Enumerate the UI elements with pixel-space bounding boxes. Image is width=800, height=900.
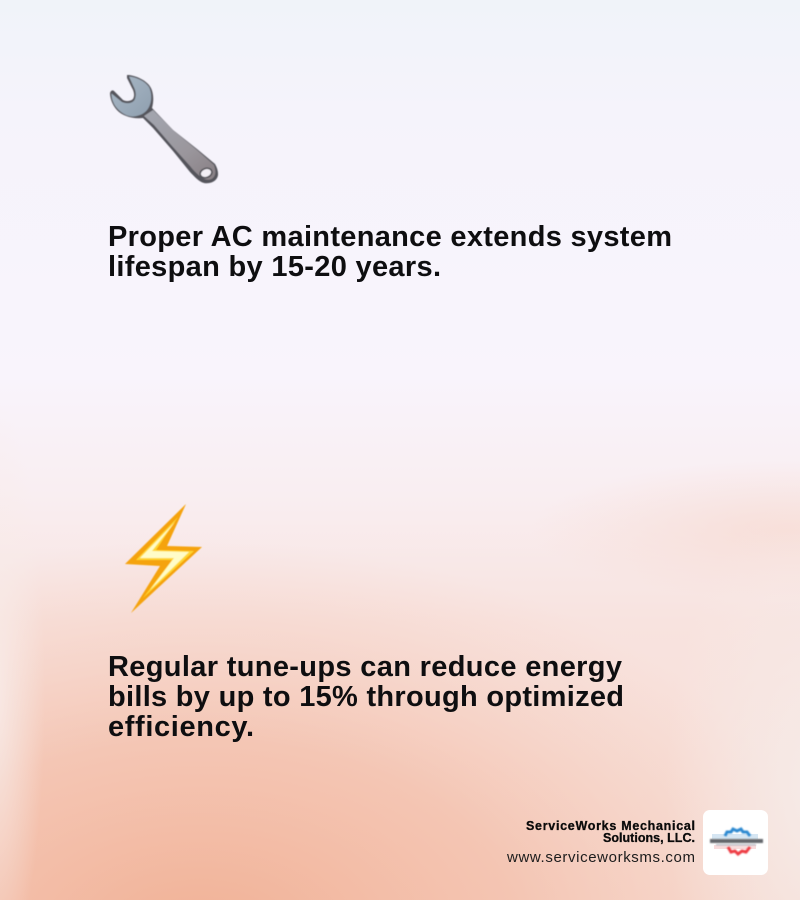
heading: lifespan fact: lifespan by 15-20 years. (108, 251, 441, 283)
company name: ServiceWorks Mechanical (526, 819, 695, 833)
heading: lifespan fact (108, 221, 672, 283)
heading: energy savings fact: efficiency. (108, 711, 254, 743)
heading: energy savings fact (108, 651, 624, 743)
heading: energy savings fact: Regular tune-ups can reduce energy (108, 651, 622, 683)
icon: lightning bolt (125, 504, 202, 613)
logo card (703, 810, 768, 875)
company name (526, 819, 695, 845)
heading: energy savings fact: bills by up to 15% through optimized (108, 681, 624, 713)
brand footer (506, 810, 768, 875)
website: www.serviceworksms.com (506, 849, 695, 866)
heading: lifespan fact: Proper AC maintenance extends system (108, 221, 672, 253)
company name: Solutions, LLC. (603, 831, 695, 845)
icon: wrench (110, 75, 218, 183)
